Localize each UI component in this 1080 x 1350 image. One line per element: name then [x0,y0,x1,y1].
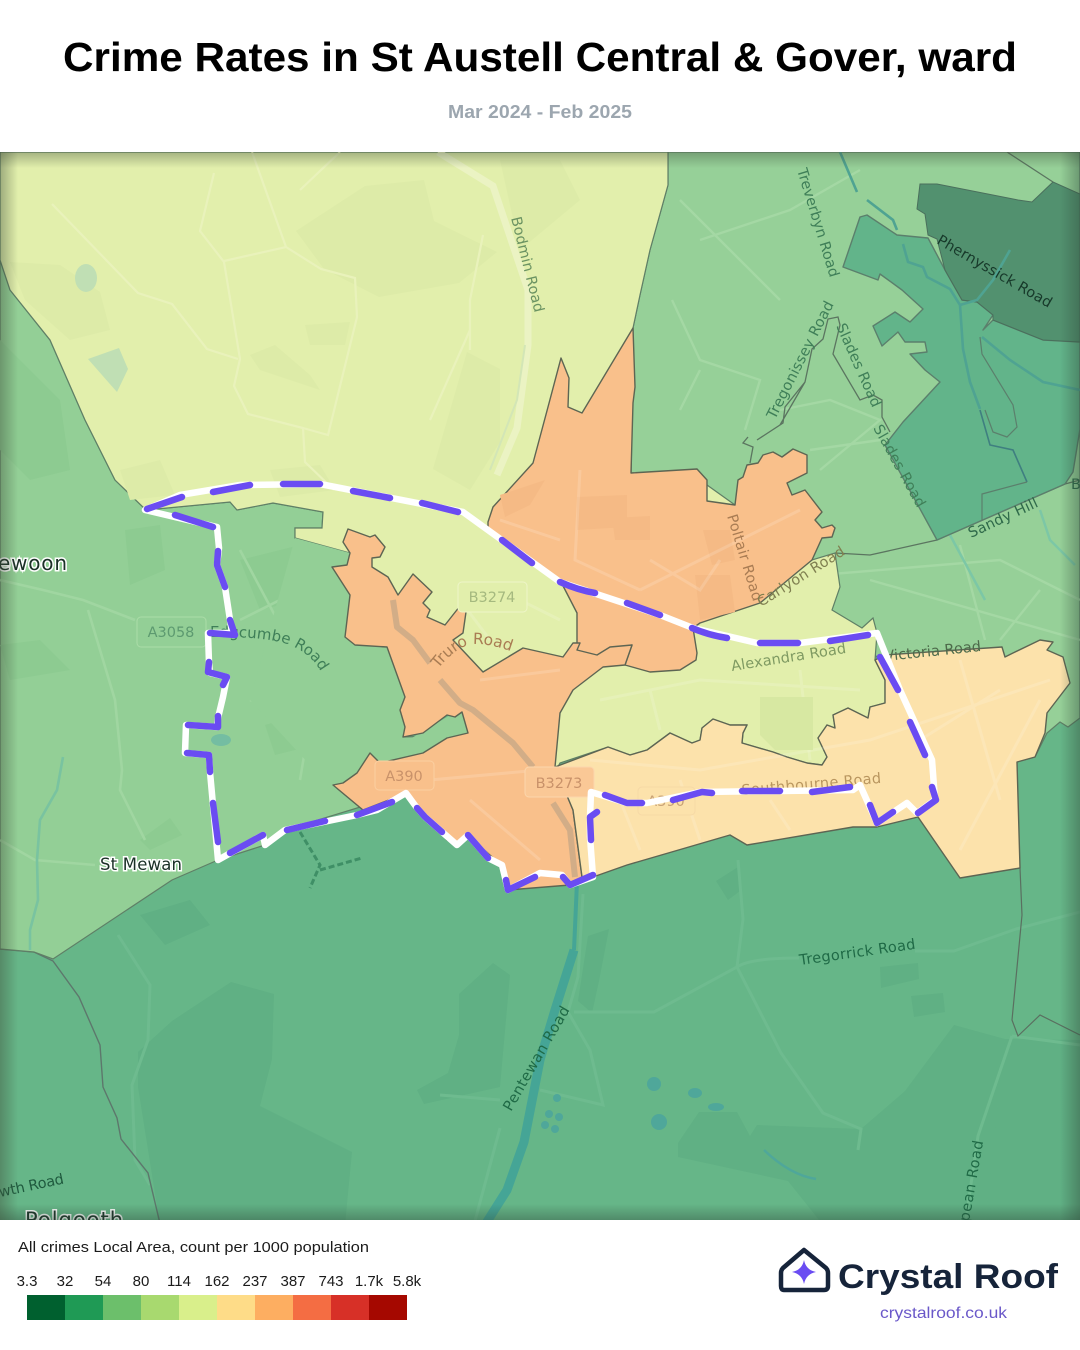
legend values: 387 [280,1273,306,1290]
map area: west terrain patches [0,340,1,646]
ward dashes purple [147,484,936,890]
map area: south orange [332,529,632,890]
map area: north-east roads [672,170,1080,640]
label: Treverbyn Road: Treverbyn Road [793,166,842,279]
subtitle: date range: Mar 2024 - Feb 2025 [448,102,632,122]
map area: north-east light green [631,152,1080,762]
label: Phernyssick Road: Phernyssick Road [934,233,1055,311]
map area: south roads [118,860,1080,1232]
map area: north orange [488,328,835,672]
legend values: 162 [204,1273,230,1290]
shield: B3273 [525,767,594,797]
label: Bodmin Road: Bodmin Road [507,215,546,314]
legend values: 54 [95,1273,111,1290]
map area: orange built-up patches [500,492,735,616]
shield: B3273: B3273 [536,776,582,792]
map area: west roads [0,550,304,866]
logo [781,1250,1059,1322]
label: Polgooth: Polgooth [25,1208,123,1232]
label: Victoria Road: Victoria Road [884,639,982,665]
legend values: 1.7k [355,1273,384,1290]
map area: railway line south [300,832,362,888]
legend title: All crimes Local Area, count per 1000 population [18,1240,369,1256]
label: Alexandra Road: Alexandra Road [730,641,847,675]
label: Slades Road lower: Slades Road [870,422,928,510]
ward boundary [145,484,936,890]
map area: streams north-east [840,152,1080,482]
map edge vignette [0,152,1080,1220]
label: Tregorrick Road: Tregorrick Road [797,937,916,969]
map area: park patch [760,697,813,750]
label: Truro Road: Truro Road [430,632,514,666]
map area: green notch west of town [250,538,470,790]
shield: A390 east: A390 [647,794,685,810]
shield: B3274 [458,582,527,612]
map [0,152,1080,1220]
road shields [137,582,695,815]
map area: south terrain patches [138,867,1080,1225]
shield: A3058 [137,617,206,647]
logo wordmark: Crystal Roof [838,1258,1059,1296]
map area: stream south [764,1150,816,1179]
icon: crystal roof house [781,1250,828,1290]
map area: ponds south [541,1077,724,1133]
shield: A3058: A3058 [148,625,194,641]
label: St Mewan: St Mewan [100,855,182,874]
map area: east stream [950,510,1075,600]
map area: north-east dark green [917,182,1080,342]
map area: terrain patches in the north [126,490,136,500]
map area: tan east [555,640,1070,878]
map area: water pond west [211,734,231,746]
map area: east medium-green ward [843,215,1080,540]
ward outline white [145,484,935,890]
label: Slades Road upper: Slades Road [832,321,884,410]
label: Poltair Road: Poltair Road [723,512,765,603]
logo url: crystalroof.co.uk [880,1305,1008,1322]
legend [17,1240,422,1320]
map area: north roads [52,152,483,490]
map area: railway thick band [393,600,575,877]
label: Sticker fragment: ewoon [0,551,67,575]
label: Tregonissey Road: Tregonissey Road [764,299,838,423]
shield: B3274: B3274 [469,590,515,606]
map area: SW boundary line [0,949,162,1232]
shield: A390 [375,761,434,790]
legend values: 32 [57,1273,73,1290]
map area: ponds [75,264,128,392]
shield: A390 east [638,787,695,815]
map area: medium-green inner boundaries [980,337,1027,520]
label: Southbourne Road: Southbourne Road [741,771,882,799]
label: Sandy Hill: Sandy Hill [966,495,1041,542]
legend values: 743 [318,1273,344,1290]
map area: north-east boundary lines [743,152,1080,555]
legend values: 80 [133,1273,149,1290]
map area: town roads [430,470,1050,860]
legend values: 114 [167,1273,191,1290]
legend values: 3.3 [17,1273,37,1290]
map area: north and central yellow-green [0,152,885,800]
map area: river [483,882,577,1228]
label: Pentewan Road: Pentewan Road [501,1004,573,1114]
title: Crime Rates in St Austell Central & Gover, ward [63,34,1017,80]
map area: Bodmin road corridor [438,152,528,475]
map area: west light green [0,262,415,960]
legend values: 237 [242,1273,268,1290]
label: Edgcumbe Road: Edgcumbe Road [212,626,330,670]
label: Carlyon Road: Carlyon Road [755,544,848,610]
map area: Bodmin road stream [490,345,525,470]
label: pean Road: pean Road [957,1139,987,1223]
legend colour scale [27,1295,407,1320]
shield: A390: A390 [385,769,423,785]
map area: south-east boundary line [1012,868,1080,1036]
legend values [17,1273,422,1290]
map area: west stream [30,757,63,950]
legend values: 5.8k [393,1273,422,1290]
